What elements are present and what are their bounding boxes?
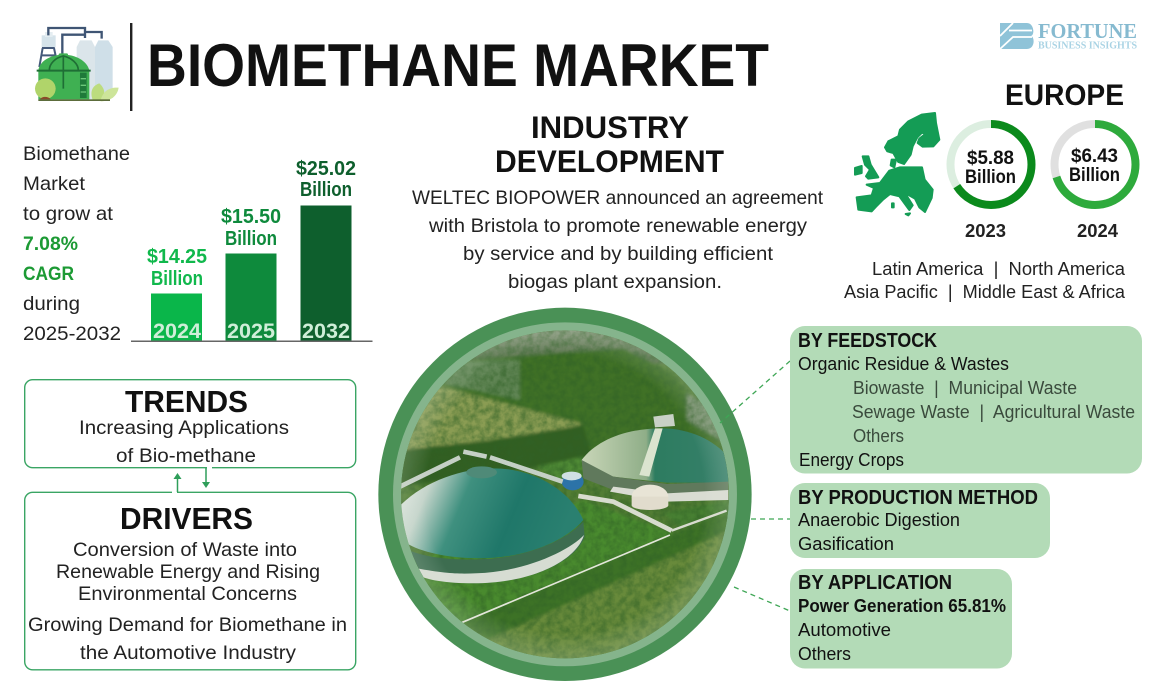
panel: by application xyxy=(790,569,1012,668)
bar: 2024: Billion xyxy=(151,268,203,290)
logo: Fortune Business Insights: FORTUNE xyxy=(1038,19,1137,43)
panel: drivers: Conversion of Waste into xyxy=(73,539,297,561)
bar: 2032: 2032 xyxy=(302,320,350,343)
bar: 2032: Billion xyxy=(300,179,352,201)
text block: market growth: CAGR xyxy=(23,263,74,285)
panel: by application: Power Generation 65.81% xyxy=(798,596,1006,616)
donut: Europe 2024: $6.43 xyxy=(1071,146,1118,167)
map: Europe xyxy=(855,113,939,215)
heading: Europe: EUROPE xyxy=(1005,79,1124,112)
connector: production method xyxy=(751,518,790,520)
panel: by feedstock: Sewage Waste | Agricultural Waste xyxy=(852,402,1135,422)
donut: Europe 2024 xyxy=(1054,124,1136,241)
text block: market growth: 7.08% xyxy=(23,233,78,255)
donut: Europe 2023: Billion xyxy=(965,167,1016,188)
divider: title rule xyxy=(130,23,132,111)
text block: industry development note: WELTEC BIOPOWER announced an agreement xyxy=(412,187,824,209)
donut: Europe 2024: 2024 xyxy=(1077,221,1118,241)
bar chart: market size xyxy=(131,158,372,343)
panel: by production method xyxy=(790,483,1050,558)
connector: feedstock xyxy=(720,361,790,423)
logo: Fortune Business Insights: BUSINESS INSIGHTS xyxy=(1038,40,1137,52)
bar: 2025 xyxy=(221,206,281,343)
text block: other regions xyxy=(844,259,1126,302)
panel: drivers: DRIVERS xyxy=(120,501,253,536)
bar: 2024: 2024 xyxy=(153,320,201,343)
panel: drivers: the Automotive Industry xyxy=(80,642,296,664)
donut: Europe 2023: $5.88 xyxy=(967,148,1014,169)
text block: market growth: to grow at xyxy=(23,203,114,225)
bar: 2024: $14.25 xyxy=(147,246,207,268)
donut: Europe 2023: 2023 xyxy=(965,221,1006,241)
text block: market growth: Biomethane xyxy=(23,143,130,165)
panel: by application: BY APPLICATION xyxy=(798,572,952,594)
text block: industry development note: with Bristola to promote renewable energy xyxy=(428,215,807,237)
panel: by feedstock: BY FEEDSTOCK xyxy=(798,330,937,352)
panel: by feedstock: Others xyxy=(853,426,904,446)
panel: drivers: Growing Demand for Biomethane in xyxy=(28,614,347,636)
panel: by feedstock: Biowaste | Municipal Waste xyxy=(853,378,1077,398)
bar: 2024 xyxy=(147,246,207,343)
panel: by feedstock: Energy Crops xyxy=(799,450,904,470)
panel: drivers xyxy=(25,490,356,670)
heading: industry development: INDUSTRY xyxy=(531,109,689,145)
arrows: trends and drivers link xyxy=(174,468,210,492)
heading: industry development xyxy=(495,109,724,179)
panel: by production method: Anaerobic Digestion xyxy=(798,510,960,530)
panel: trends: of Bio-methane xyxy=(116,445,256,467)
bar: 2025: $15.50 xyxy=(221,206,281,228)
panel: by production method: BY PRODUCTION METHOD xyxy=(798,487,1038,509)
heading: industry development: DEVELOPMENT xyxy=(495,143,724,179)
text block: industry development note: by service and by building efficient xyxy=(463,243,774,265)
connector: application xyxy=(734,587,790,611)
panel: trends: Increasing Applications xyxy=(79,417,289,439)
text block: other regions: Latin America | North America xyxy=(872,259,1126,279)
panel: by application: Automotive xyxy=(798,620,891,640)
donut: Europe 2024: Billion xyxy=(1069,165,1120,186)
title: BIOMETHANE MARKET xyxy=(147,32,769,99)
panel: trends xyxy=(25,380,356,470)
text block: market growth: Market xyxy=(23,173,86,195)
panel: trends: TRENDS xyxy=(125,384,248,419)
text block: industry development note xyxy=(412,187,824,293)
text block: industry development note: biogas plant expansion. xyxy=(508,271,722,293)
bar: 2032: $25.02 xyxy=(296,158,356,180)
text block: market growth: 2025-2032 xyxy=(23,323,121,345)
logo: Fortune Business Insights xyxy=(1000,19,1137,52)
panel: by feedstock xyxy=(790,326,1142,474)
bar: 2025: Billion xyxy=(225,228,277,250)
text block: other regions: Asia Pacific | Middle East & Africa xyxy=(844,282,1126,302)
text block: market growth: during xyxy=(23,293,80,315)
bar: 2025: 2025 xyxy=(227,320,275,343)
panel: by application: Others xyxy=(798,644,851,664)
donut: Europe 2023 xyxy=(950,124,1032,241)
panel: by production method: Gasification xyxy=(798,534,894,554)
bar: 2032 xyxy=(296,158,356,343)
panel: drivers: Environmental Concerns xyxy=(78,583,297,605)
panel: by feedstock: Organic Residue & Wastes xyxy=(798,354,1009,374)
text block: market growth xyxy=(23,143,130,345)
icon: biogas plant xyxy=(35,28,119,101)
photo: biogas plant in circular frame xyxy=(378,308,752,681)
panel: drivers: Renewable Energy and Rising xyxy=(56,561,320,583)
